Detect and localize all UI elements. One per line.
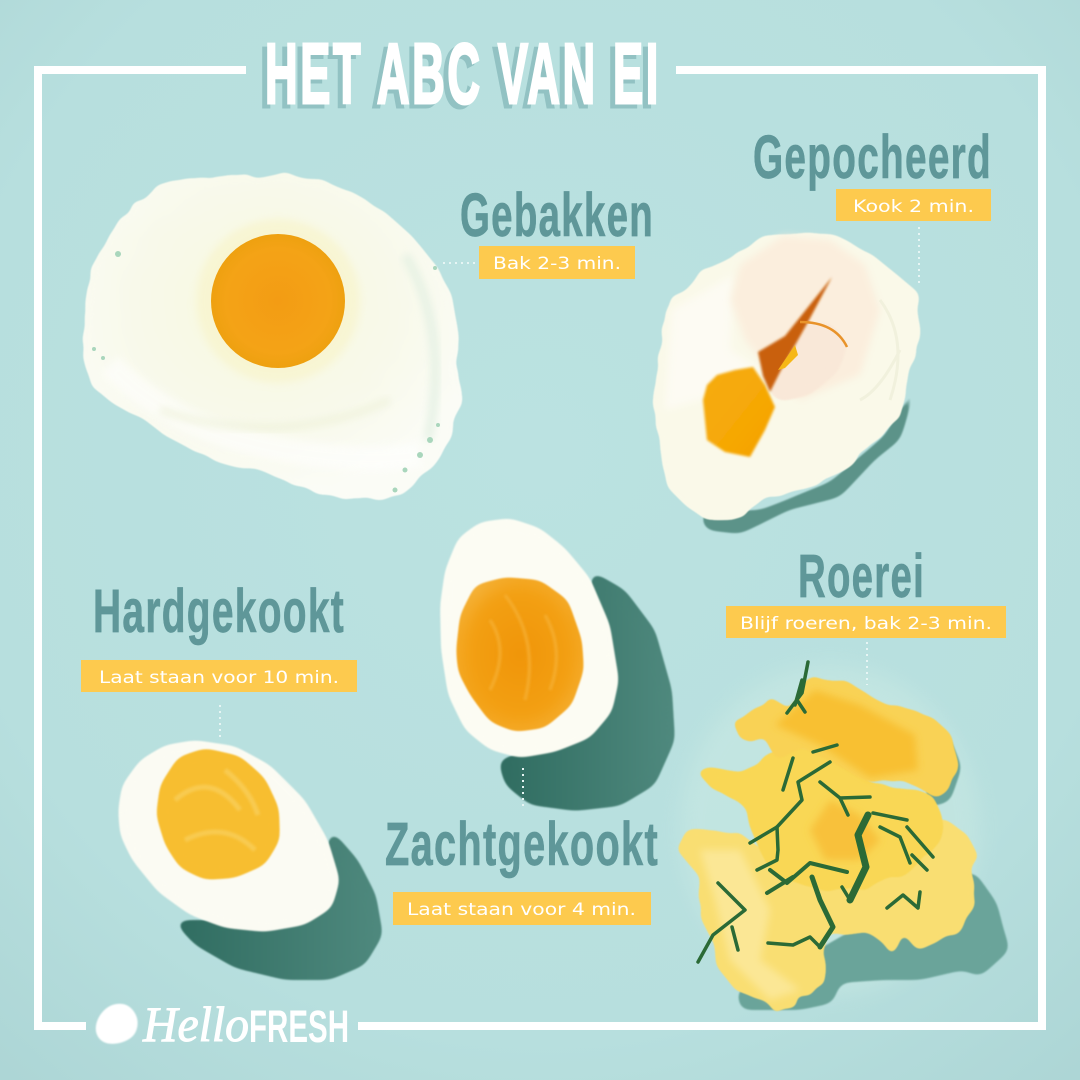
heading: gepocheerd xyxy=(753,123,992,221)
hard boiled egg xyxy=(118,740,383,980)
scrambled eggs xyxy=(677,662,1010,1015)
heading: zachtgekookt xyxy=(385,810,659,925)
logo: hellofresh xyxy=(94,996,349,1052)
title: HET ABC VAN EI xyxy=(265,27,661,122)
mid eggs xyxy=(697,747,943,890)
label: laat staan 4 xyxy=(393,892,651,925)
label: kook: Kook 2 min. xyxy=(853,197,974,217)
lower eggs xyxy=(677,820,978,1015)
yolk xyxy=(211,234,345,368)
label: laat staan 4: Laat staan voor 4 min. xyxy=(407,900,636,920)
bubbles xyxy=(92,251,440,492)
pointer: zachtgekookt xyxy=(522,768,524,806)
heading: gebakken xyxy=(460,181,654,279)
pointer: roerei xyxy=(866,642,868,685)
shadow xyxy=(737,872,1010,1010)
heading: roerei xyxy=(726,542,1006,638)
herbs xyxy=(698,662,933,962)
pointer: gepocheerd xyxy=(918,227,920,285)
glow xyxy=(680,665,980,995)
pointer: hardgekookt xyxy=(219,705,221,738)
label: kook xyxy=(836,189,991,221)
label: laat staan 10: Laat staan voor 10 min. xyxy=(99,668,339,688)
fried egg xyxy=(83,175,461,500)
poached egg xyxy=(653,232,926,534)
label: blijf roeren xyxy=(726,606,1006,638)
label: laat staan 10 xyxy=(81,660,357,692)
logo: hellofresh: FRESH xyxy=(249,1001,349,1052)
soft yolk xyxy=(456,577,584,732)
label: blijf roeren: Blijf roeren, bak 2-3 min. xyxy=(740,614,992,634)
icon: lemon xyxy=(94,1003,139,1044)
label: bak: Bak 2-3 min. xyxy=(493,254,621,274)
hard yolk xyxy=(156,748,280,880)
poached yolk xyxy=(703,367,775,457)
label: bak xyxy=(479,246,635,279)
heading: zachtgekookt: Zachtgekookt xyxy=(385,810,659,878)
logo: hellofresh: Hello xyxy=(142,996,249,1052)
heading: hardgekookt: Hardgekookt xyxy=(93,577,345,645)
heading: roerei: Roerei xyxy=(798,542,925,610)
heading: gebakken: Gebakken xyxy=(460,181,654,249)
pointer: gebakken xyxy=(443,262,475,264)
soft boiled egg xyxy=(440,518,675,811)
upper eggs xyxy=(735,677,960,797)
title xyxy=(260,27,661,126)
heading: hardgekookt xyxy=(81,577,357,692)
title: HET ABC VAN EI xyxy=(260,31,656,126)
